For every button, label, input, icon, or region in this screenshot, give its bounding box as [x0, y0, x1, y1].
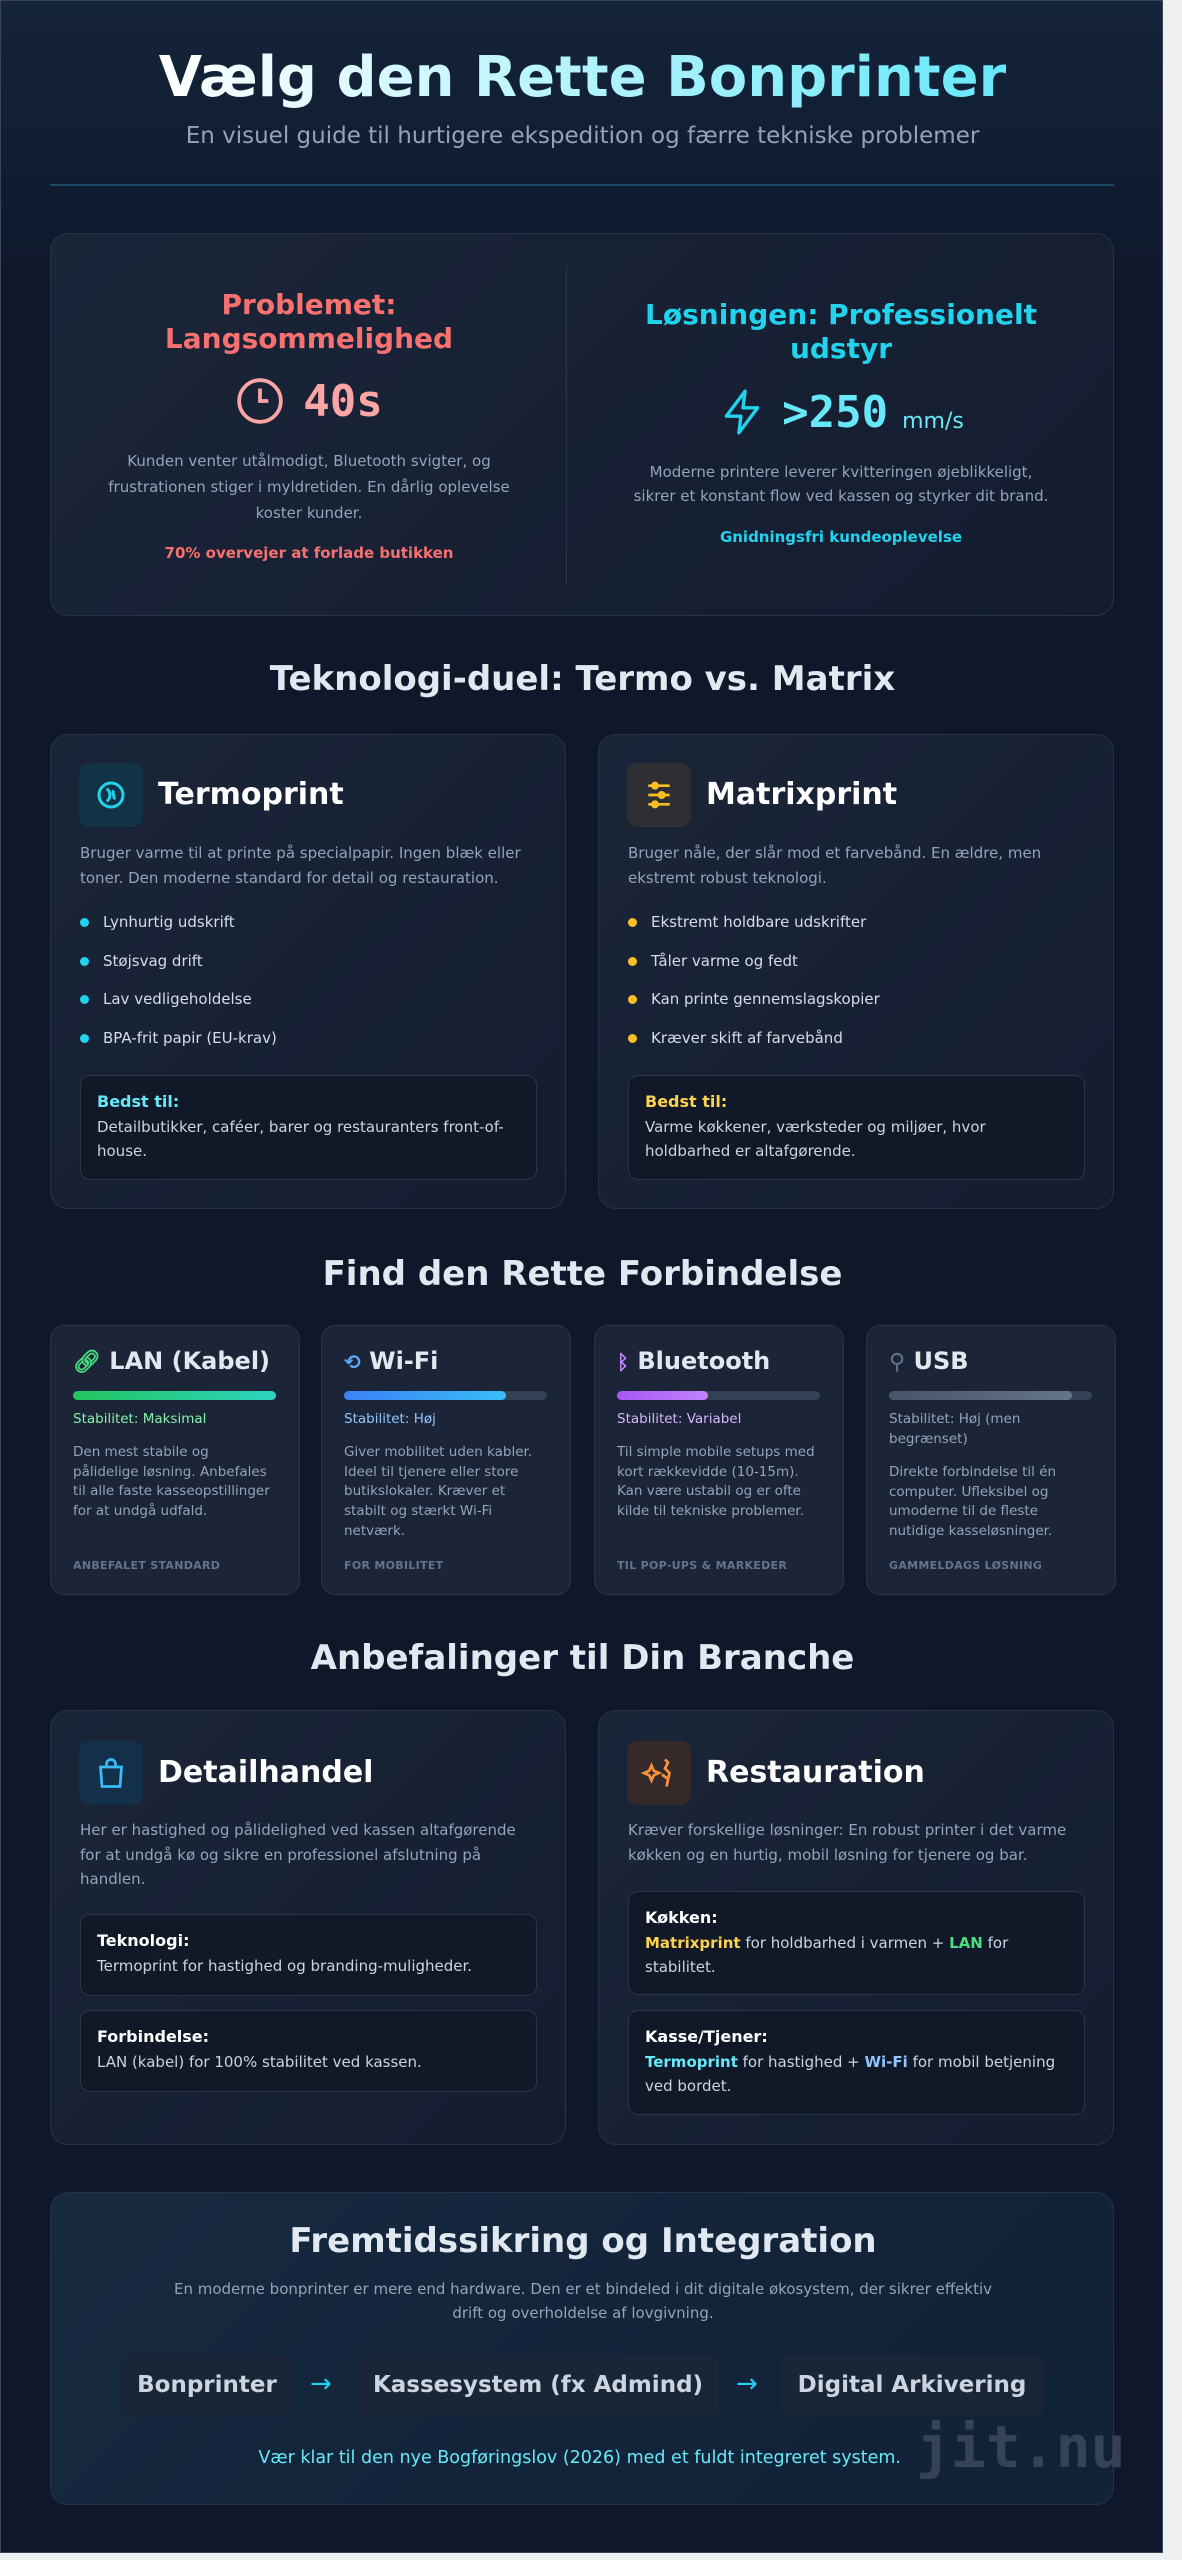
card: Bluetooth: Til simple mobile setups med — [617, 1444, 815, 1460]
arrow: → — [310, 2369, 332, 2399]
callout: best for: Detailbutikker, caféer, barer og restauranters front-of-house. — [97, 1118, 504, 1160]
panel: future-proofing: drift og overholdelse af lovgivning. — [452, 2304, 714, 2322]
icon: chef sparkle — [627, 1741, 691, 1805]
icon: thermal — [79, 763, 143, 827]
callout: technology — [80, 1914, 537, 1996]
card: LAN — [50, 1325, 300, 1595]
heading: industry recommendations: Anbefalinger til Din Branche — [311, 1638, 854, 1678]
callout: kitchen: Matrixprint for holdbarhed i varmen + LAN for stabilitet. — [645, 1934, 1008, 1976]
flow: Kassesystem — [357, 2355, 719, 2416]
panel: Matrixprint: Tåler varme og fedt — [651, 952, 798, 970]
callout: cashier/waiter — [628, 2010, 1085, 2115]
card: LAN: til alle faste kasseopstillinger — [73, 1483, 270, 1499]
card: USB — [866, 1325, 1116, 1595]
flow: Bonprinter: Bonprinter — [137, 2372, 277, 2398]
stat: >250 mm/s: mm/s — [902, 408, 964, 434]
stat: 40s — [237, 376, 383, 426]
solution column — [634, 298, 1048, 546]
card: Wi-Fi: Giver mobilitet uden kabler. — [344, 1444, 532, 1460]
callout: connection — [80, 2010, 537, 2092]
flow: Kassesystem: Kassesystem (fx Admind) — [373, 2372, 703, 2398]
callout: connection: Forbindelse: — [97, 2027, 209, 2046]
stat: 40s: 40s — [303, 376, 383, 426]
callout: best for — [628, 1075, 1085, 1180]
card: LAN: 🔗︎ LAN (Kabel) — [73, 1347, 270, 1375]
problem column: Langsommelighed — [165, 322, 453, 355]
heading: connections: Find den Rette Forbindelse — [323, 1254, 842, 1294]
solution column: Løsningen: Professionelt — [645, 298, 1037, 331]
stat: >250 mm/s: >250 — [782, 386, 888, 438]
card: Bluetooth: Kan være ustabil og er ofte — [617, 1483, 801, 1499]
icon: shopping bag — [79, 1741, 143, 1805]
card: Wi-Fi: ⟲ Wi-Fi — [344, 1347, 438, 1375]
solution column: Gnidningsfri kundeoplevelse — [720, 528, 962, 546]
panel: Restauration: Restauration — [706, 1755, 925, 1790]
card: LAN: Den mest stabile og — [73, 1444, 209, 1460]
callout: cashier/waiter: Kasse/Tjener: — [645, 2027, 768, 2046]
icon: sliders — [627, 763, 691, 827]
card: Bluetooth: kilde til tekniske problemer. — [617, 1503, 804, 1519]
callout: kitchen: Køkken: — [645, 1908, 718, 1927]
panel: Matrixprint: Ekstremt holdbare udskrifter — [651, 913, 866, 931]
panel: future-proofing: En moderne bonprinter er mere end hardware. Den er et bindeled i dit digitale økosystem, der sikrer effektiv — [174, 2280, 992, 2298]
solution column: udstyr — [790, 332, 892, 365]
callout: technology: Teknologi: — [97, 1931, 189, 1950]
card: LAN: for at undgå udfald. — [73, 1503, 207, 1519]
card: Wi-Fi: Ideel til tjenere eller store — [344, 1464, 518, 1480]
panel: Termoprint: Lav vedligeholdelse — [103, 990, 252, 1008]
problem column: 70% overvejer at forlade butikken — [165, 544, 453, 562]
callout: technology: Termoprint for hastighed og branding-muligheder. — [97, 1956, 472, 1974]
card: Wi-Fi: butikslokaler. Kræver et — [344, 1483, 505, 1499]
solution column: sikrer et konstant flow ved kassen og styrker dit brand. — [634, 487, 1048, 505]
panel: Termoprint: Termoprint — [158, 777, 344, 812]
panel: Matrixprint: Matrixprint — [706, 777, 897, 812]
arrow: → — [736, 2369, 758, 2399]
card: Bluetooth — [594, 1325, 844, 1595]
panel: Termoprint: BPA-frit papir (EU-krav) — [103, 1029, 277, 1047]
panel: future-proofing: Fremtidssikring og Integration — [289, 2221, 877, 2261]
panel: Termoprint — [50, 734, 566, 1209]
card: Bluetooth: kort rækkevidde (10-15m). — [617, 1464, 799, 1480]
panel: Detailhandel: Detailhandel — [158, 1755, 373, 1790]
card: Wi-Fi: FOR MOBILITET — [344, 1559, 443, 1572]
panel: Matrixprint — [598, 734, 1114, 1209]
card: Wi-Fi — [321, 1325, 571, 1595]
card: USB: nutidige kasseløsninger. — [889, 1523, 1052, 1539]
panel: Termoprint: Lynhurtig udskrift — [103, 913, 235, 931]
callout: cashier/waiter: Termoprint for hastighed + Wi-Fi for mobil betjening ved bordet. — [645, 2052, 1055, 2095]
card: USB: ⚲ USB — [889, 1347, 969, 1375]
panel: Matrixprint: Kan printe gennemslagskopier — [651, 990, 880, 1008]
flow: Digital Arkivering: Digital Arkivering — [798, 2372, 1026, 2398]
panel: Restauration — [598, 1710, 1114, 2145]
card: Wi-Fi: stabilt og stærkt Wi-Fi — [344, 1503, 492, 1519]
panel: problem vs solution — [50, 233, 1114, 616]
panel: Matrixprint: Kræver skift af farvebånd — [651, 1029, 843, 1047]
card: USB: Stabilitet: Høj (men begrænset) — [889, 1411, 1020, 1447]
panel: Detailhandel — [50, 1710, 566, 2145]
watermark: jit.nu — [916, 2413, 1126, 2481]
panel: Termoprint: Støjsvag drift — [103, 952, 203, 970]
footer note: Vær klar til den nye Bogføringslov (2026) med et fuldt integreret system. — [258, 2448, 901, 2468]
card: USB: Direkte forbindelse til én — [889, 1464, 1056, 1480]
callout: best for: Varme køkkener, værksteder og miljøer, hvor holdbarhed er altafgørende. — [645, 1118, 986, 1160]
card: Bluetooth: TIL POP-UPS & MARKEDER — [617, 1559, 787, 1572]
problem column — [108, 288, 510, 562]
subtitle: En visuel guide til hurtigere ekspedition og færre tekniske problemer — [186, 123, 979, 149]
panel: Matrixprint: Bruger nåle, der slår mod et farvebånd. En ældre, men ekstremt robust teknologi. — [628, 844, 1041, 886]
problem column: Kunden venter utålmodigt, Bluetooth svigter, og frustrationen stiger i myldretiden. En dårlig oplevelse koster kunder. — [108, 452, 510, 522]
solution column: Moderne printere leverer kvitteringen øjeblikkeligt, — [650, 463, 1032, 481]
flow: Digital Arkivering — [781, 2355, 1043, 2416]
callout: connection: LAN (kabel) for 100% stabilitet ved kassen. — [97, 2052, 422, 2070]
problem column: Problemet: — [222, 288, 396, 321]
callout: kitchen — [628, 1891, 1085, 1995]
card: USB: umoderne til de fleste — [889, 1503, 1038, 1519]
card: Wi-Fi: netværk. — [344, 1523, 405, 1539]
heading: technology duel: Teknologi-duel: Termo vs. Matrix — [270, 659, 895, 699]
card: Wi-Fi: Stabilitet: Høj — [344, 1411, 436, 1427]
stat: >250 mm/s — [724, 386, 964, 438]
card: LAN: ANBEFALET STANDARD — [73, 1559, 220, 1572]
card: LAN: pålidelige løsning. Anbefales — [73, 1464, 267, 1480]
panel: Restauration: Kræver forskellige løsninger: En robust printer i det varme køkken og en hurtig, mobil løsning for tjenere og bar. — [628, 1821, 1066, 1864]
card: USB: computer. Ufleksibel og — [889, 1484, 1048, 1500]
card: Bluetooth: Stabilitet: Variabel — [617, 1411, 741, 1427]
card: USB: GAMMELDAGS LØSNING — [889, 1559, 1042, 1572]
panel: Termoprint: Bruger varme til at printe på specialpapir. Ingen blæk eller toner. Den moderne standard for detail og restauration. — [80, 844, 521, 886]
flow: Bonprinter — [122, 2355, 292, 2416]
callout: best for: Bedst til: — [97, 1092, 179, 1111]
callout: best for — [80, 1075, 537, 1180]
callout: best for: Bedst til: — [645, 1092, 727, 1111]
panel: future-proofing — [50, 2192, 1114, 2505]
card: Bluetooth: ᛒ Bluetooth — [617, 1347, 770, 1375]
title: Vælg den Rette Bonprinter — [159, 45, 1006, 110]
panel: Detailhandel: Her er hastighed og pålidelighed ved kassen altafgørende for at undgå kø og sikre en professionel afslutning på handlen. — [80, 1821, 516, 1888]
card: LAN: Stabilitet: Maksimal — [73, 1411, 206, 1427]
